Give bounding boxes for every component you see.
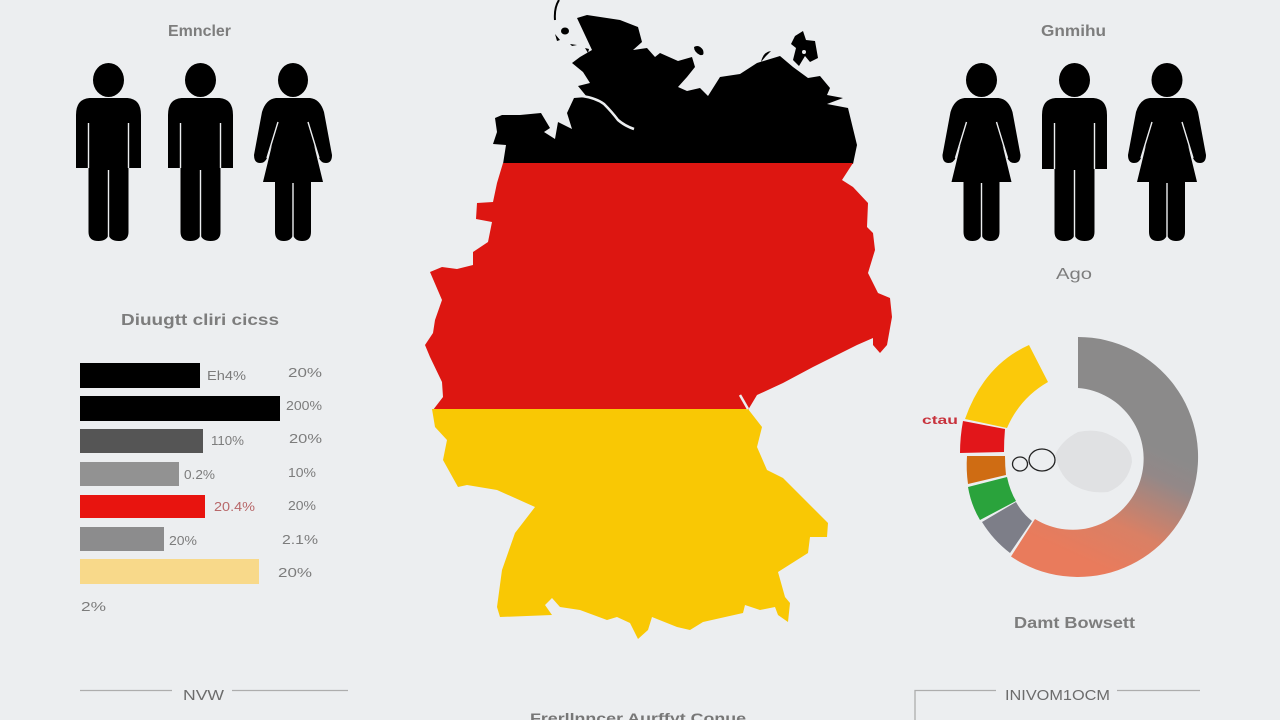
bar chart heading: Diuugtt cliri cicss <box>121 312 279 329</box>
footer: left section: NVW <box>183 687 225 704</box>
donut heading: Ago <box>1056 266 1092 283</box>
map band: yellow <box>432 409 828 639</box>
bar 3: 110% <box>211 433 244 448</box>
bar 2: 200% <box>286 398 322 413</box>
donut segment: green <box>968 477 1016 520</box>
donut segment: slate <box>982 502 1032 553</box>
bar 3 <box>80 429 323 453</box>
bar 6 <box>80 527 319 551</box>
bar 3: 20% <box>289 431 323 446</box>
donut segment: yellow <box>965 345 1048 428</box>
panel: bar chart <box>80 312 323 614</box>
icon: woman <box>254 63 332 241</box>
donut segment: gray to coral <box>1011 337 1198 577</box>
bar 5 <box>80 495 316 518</box>
bar 6: 2.1% <box>282 532 319 547</box>
map of Germany in flag colours <box>425 0 892 639</box>
footer: right section: INIVOM1OCM <box>1005 687 1110 704</box>
icon: man <box>1042 63 1107 241</box>
map band: black <box>493 0 857 164</box>
donut caption: Damt Bowsett <box>1014 615 1136 632</box>
panel: donut chart <box>922 266 1198 632</box>
bar 7: 20% <box>278 565 313 580</box>
icon: woman 1 <box>942 63 1020 241</box>
donut centre blob <box>1055 431 1132 492</box>
bar 2 <box>80 396 322 421</box>
bar 5: 20.4% <box>214 499 255 514</box>
donut segment label: ctau <box>922 413 958 427</box>
footnote value: 2% <box>81 599 107 614</box>
heading: right figures: Gnmihu <box>1041 23 1106 40</box>
bar 1: Eh4% <box>207 368 246 383</box>
bar 4: 10% <box>288 465 316 480</box>
map band: red <box>425 163 892 410</box>
bar 1 <box>80 363 323 388</box>
panel: left gender figures <box>76 23 332 241</box>
bar 6: 20% <box>169 533 197 548</box>
heading: left figures: Emncler <box>168 23 231 40</box>
bar 7 <box>80 559 313 584</box>
bar 4 <box>80 462 316 486</box>
bar 1: 20% <box>288 365 323 380</box>
donut segment: orange <box>967 456 1006 484</box>
panel: right gender figures <box>942 23 1206 241</box>
footer: right section <box>915 687 1200 720</box>
donut centre outline icon <box>1012 449 1055 471</box>
icon: man 1 <box>76 63 141 241</box>
icon: man 2 <box>168 63 233 241</box>
icon: woman 2 <box>1128 63 1206 241</box>
bar 5: 20% <box>288 498 316 513</box>
bar 4: 0.2% <box>184 467 215 482</box>
donut segment: red <box>960 421 1005 453</box>
